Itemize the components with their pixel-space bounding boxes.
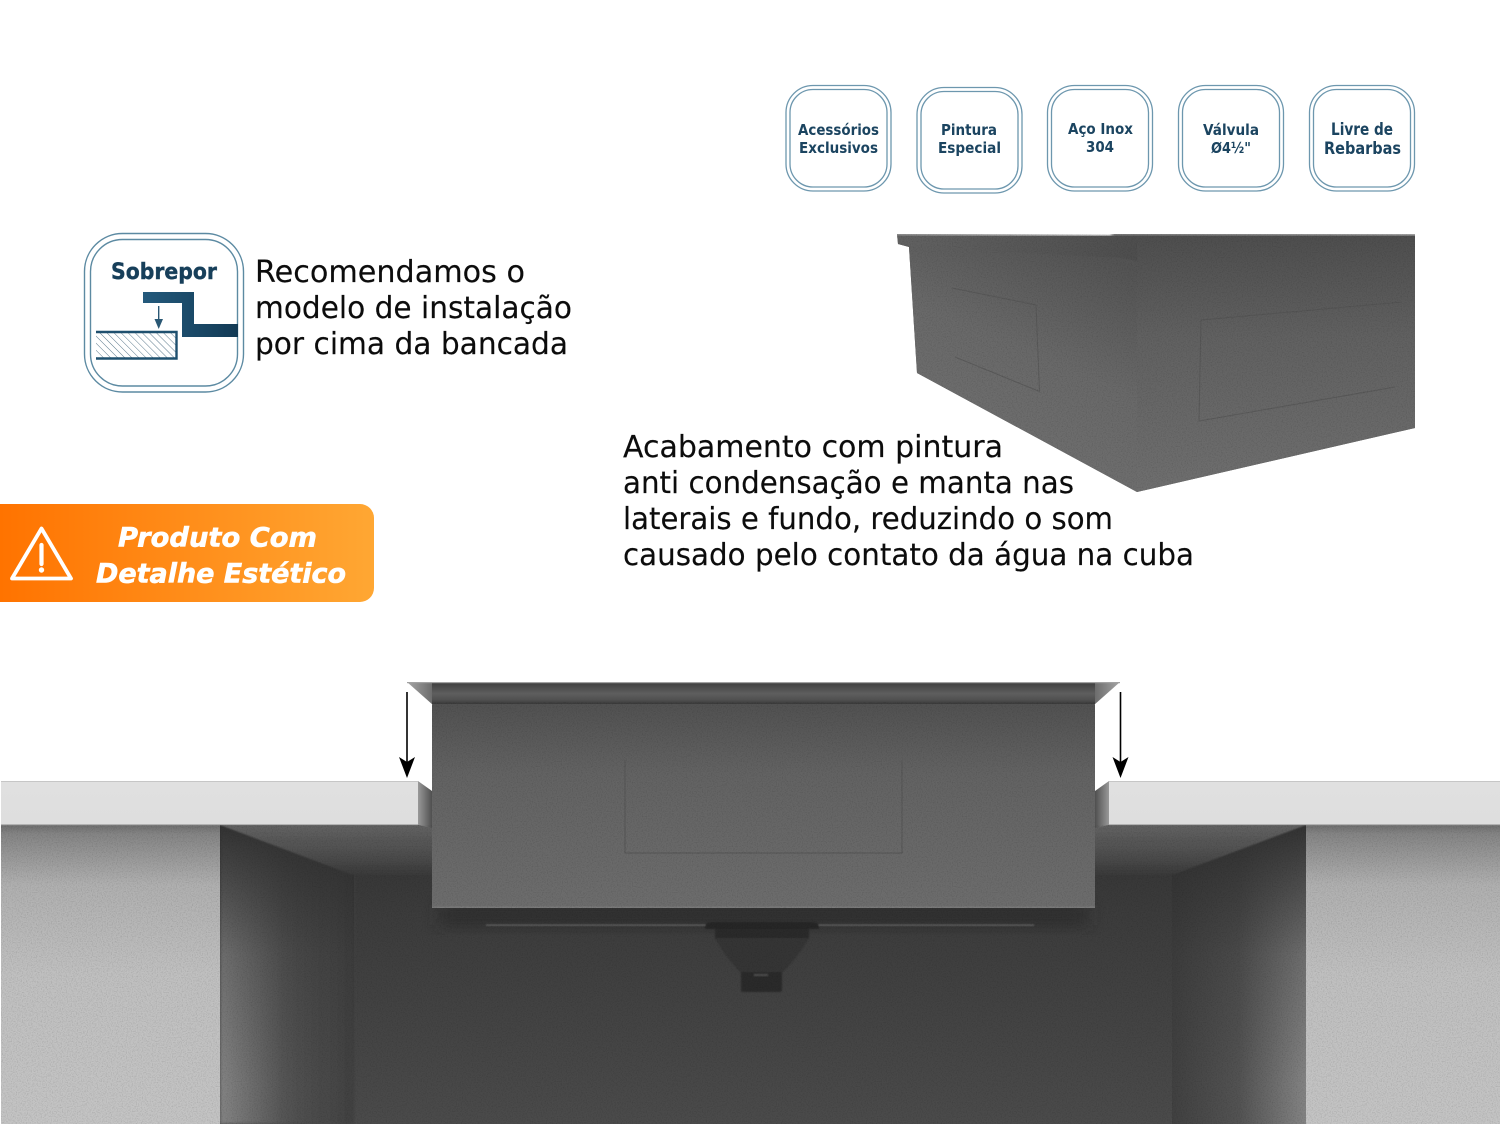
text: installation recommendation: Recomendamos o [255,255,525,290]
sink rim profile [143,292,238,337]
badge: Válvula 4½: Ø4½" [1211,139,1251,157]
badge: Válvula 4½: Válvula [1203,121,1259,139]
badge: Livre de Rebarbas: Livre de [1331,120,1393,139]
text: installation recommendation [255,255,572,362]
shadow below sink [440,905,1087,925]
cabinet right front [1306,825,1500,1124]
cabinet back wall [220,825,1306,1124]
icon: warning triangle [12,528,71,578]
badge: Pintura Especial [917,88,1022,193]
underside of countertop [220,825,1306,878]
banner text: Detalhe Estético [96,558,346,590]
text: installation recommendation: por cima da bancada [255,327,568,362]
icon: Sobrepor installation [84,234,244,392]
text: anti-condensation finish: Acabamento com pintura [623,430,1003,465]
badge: Acessórios Exclusivos [786,86,891,191]
feature badges row [786,86,1414,193]
arrow: right downward [1112,692,1128,778]
text: anti-condensation finish [623,430,1194,573]
text: anti-condensation finish: causado pelo contato da água na cuba [623,538,1194,573]
sink body [407,682,1120,908]
rim lip [897,234,1137,261]
drain fitting [486,922,1034,992]
badge: Pintura Especial: Especial [938,139,1001,157]
wall top shade left [220,825,354,1085]
badge: Livre de Rebarbas [1310,86,1414,191]
right face [1137,234,1415,492]
base silhouette [897,234,1415,492]
badge: Acessórios Exclusivos: Exclusivos [799,139,878,157]
left face [909,247,1137,492]
inner side wall right [1172,825,1306,1124]
banner text: Produto Com [118,522,317,554]
icon label: Sobrepor: Sobrepor [111,260,217,285]
product render: sink underside perspective [890,230,1420,500]
warning banner [0,504,374,602]
badge: Aço Inox 304: Aço Inox [1068,120,1133,138]
badge: Pintura Especial: Pintura [941,121,997,139]
cabinet left front [1,825,220,1124]
countertop right [1095,781,1500,828]
installation scene: cabinet and countertop [0,680,1500,1125]
badge: Aço Inox 304: 304 [1086,138,1114,156]
down arrow [154,306,163,329]
banner text [96,522,346,590]
badge: Livre de Rebarbas: Rebarbas [1324,139,1401,158]
badge: Acessórios Exclusivos: Acessórios [798,121,879,139]
badge: Válvula 4½ [1178,86,1284,191]
badge: Aço Inox 304 [1048,86,1152,191]
rim highlight [897,234,1415,236]
arrow: left downward [399,692,415,778]
sink rim [407,682,1120,705]
text: anti-condensation finish: anti condensação e manta nas [623,466,1074,501]
countertop left [1,781,432,828]
inner side wall left [220,825,354,1124]
text: installation recommendation: modelo de instalação [255,291,572,326]
wall top shade right [1172,825,1306,1085]
text: anti-condensation finish: laterais e fundo, reduzindo o som [623,502,1113,537]
countertop section [96,332,176,358]
